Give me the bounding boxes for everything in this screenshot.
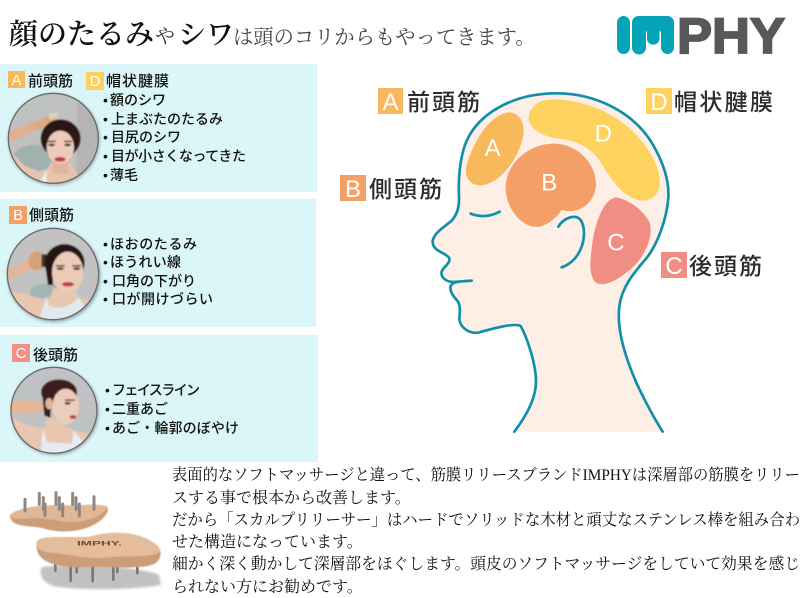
muscle D <box>529 99 660 200</box>
symptoms list: ほおのたるみ <box>110 236 197 252</box>
photo: occipital massage <box>10 366 100 457</box>
symptoms list <box>105 382 239 436</box>
symptoms list: • <box>103 254 108 270</box>
title: や <box>155 26 175 48</box>
heading: 前頭筋: 前頭筋 <box>28 73 73 90</box>
shadow <box>41 565 161 589</box>
product logo: IMPHY. <box>77 541 122 548</box>
muscle C: C <box>607 229 625 256</box>
product image: scalp releaser <box>10 493 161 589</box>
title: は頭のコリからもやってきます。 <box>233 26 536 49</box>
panel: A and D muscles <box>0 64 317 192</box>
label: A 前頭筋: A <box>382 89 399 116</box>
label: B 側頭筋 <box>340 175 442 203</box>
symptoms list: • <box>103 148 108 164</box>
symptoms list: • <box>105 401 110 417</box>
symptoms list: 口が開けづらい <box>112 291 213 307</box>
symptoms list: • <box>103 273 108 289</box>
label: D 帽状腱膜: D <box>650 89 668 116</box>
label: A 前頭筋 <box>378 88 480 116</box>
label: C 後頭筋 <box>661 252 762 280</box>
badge B: B <box>13 207 23 224</box>
muscle D: D <box>595 120 612 147</box>
label: B 側頭筋: 側頭筋 <box>369 176 442 202</box>
description text: られない方にお勧めです。 <box>172 578 363 596</box>
pins under bottom board <box>55 563 137 581</box>
photo: forehead massage <box>5 90 102 187</box>
symptoms list <box>103 92 246 183</box>
title: シワ <box>178 20 234 51</box>
badge A: A <box>11 72 22 89</box>
pins on top board <box>25 493 94 516</box>
heading: 後頭筋: 後頭筋 <box>33 347 78 364</box>
logo: IMPHY <box>617 8 785 64</box>
title: 顔のたるみ <box>9 18 154 51</box>
head silhouette <box>433 93 668 432</box>
symptoms list: 目が小さくなってきた <box>111 148 246 164</box>
symptoms list: あご・輪郭のぼやけ <box>112 420 239 436</box>
title <box>9 18 536 51</box>
logo: IMPHY: PHY <box>677 8 785 64</box>
label: C 後頭筋: C <box>665 253 683 280</box>
symptoms list: • <box>103 92 108 108</box>
label: A 前頭筋: 前頭筋 <box>407 89 480 115</box>
head diagram <box>433 93 668 432</box>
symptoms list: 額のシワ <box>110 92 166 108</box>
badge C <box>12 344 30 362</box>
symptoms list: 薄毛 <box>110 167 138 183</box>
symptoms list: • <box>103 129 108 145</box>
symptoms list: • <box>103 167 108 183</box>
muscle B <box>506 144 596 227</box>
description text: スする事で根本から改善します。 <box>172 488 411 507</box>
eye <box>471 212 500 216</box>
heading: 側頭筋: 側頭筋 <box>29 207 74 224</box>
ear <box>558 217 584 267</box>
badge B <box>9 206 27 224</box>
badge D: D <box>90 73 101 90</box>
top board <box>10 505 108 531</box>
panel: C muscle <box>0 335 318 462</box>
label: B 側頭筋: B <box>345 176 361 203</box>
description text: せた構造になっています。 <box>172 533 363 551</box>
symptoms list: 上まぶたのたるみ <box>111 111 223 127</box>
muscle B: B <box>541 170 557 197</box>
heading: 帽状腱膜: 帽状腱膜 <box>106 72 169 90</box>
muscle C <box>590 197 651 284</box>
symptoms list: 二重あご <box>112 401 168 417</box>
badge D <box>86 72 104 90</box>
symptoms list: • <box>105 382 110 398</box>
symptoms list: 口角の下がり <box>112 273 196 289</box>
badge A <box>8 71 25 89</box>
symptoms list: • <box>103 291 108 307</box>
symptoms list: 目尻のシワ <box>111 129 181 145</box>
panel: B muscle <box>0 199 316 327</box>
symptoms list: ほうれい線 <box>110 254 181 270</box>
bottom board <box>36 533 161 568</box>
photo: temple massage <box>3 225 103 325</box>
description text <box>172 466 800 596</box>
symptoms list: • <box>103 111 108 127</box>
symptoms list: • <box>105 420 110 436</box>
symptoms list: フェイスライン <box>112 382 200 398</box>
muscle A <box>466 112 524 185</box>
badge C: C <box>16 345 27 362</box>
label: D 帽状腱膜: 帽状腱膜 <box>674 89 773 115</box>
label: C 後頭筋: 後頭筋 <box>689 253 762 279</box>
description text: 細かく深く動かして深層部をほぐします。頭皮のソフトマッサージをしていて効果を感じ <box>172 554 800 573</box>
symptoms list: • <box>103 236 108 252</box>
symptoms list <box>103 236 213 307</box>
muscle A: A <box>485 135 501 162</box>
